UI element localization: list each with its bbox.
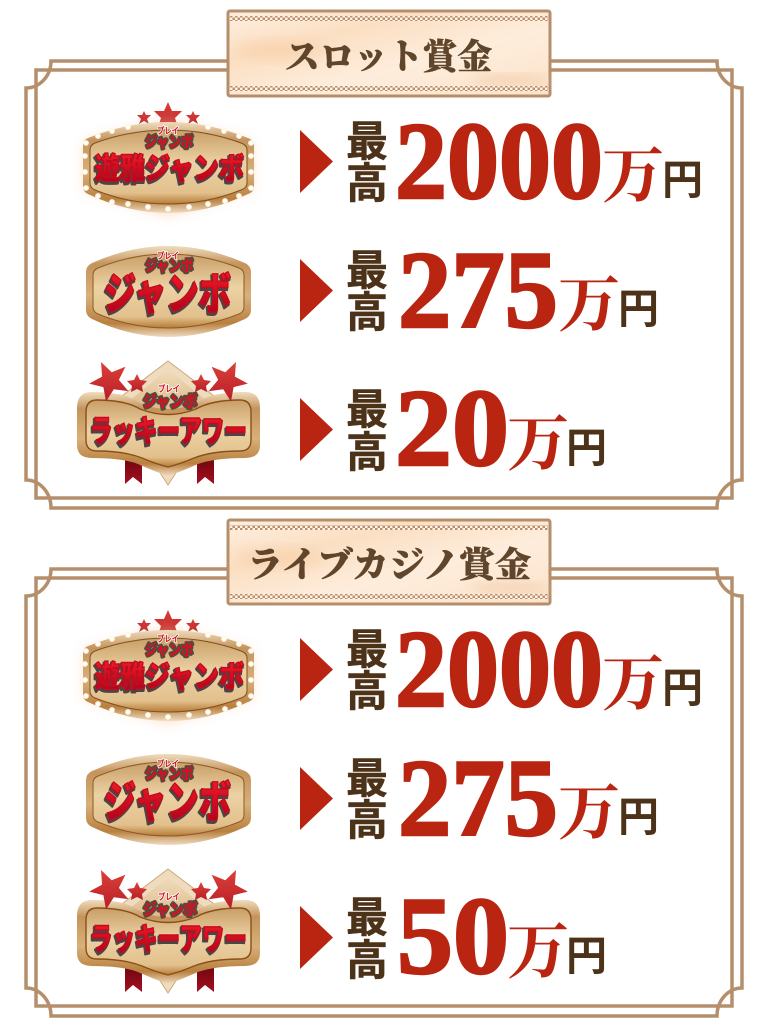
prize row: 275万円: 275 <box>398 737 558 859</box>
prize row: 50万円 <box>300 875 607 997</box>
prize row: 2000万円 <box>300 100 703 222</box>
prize row: 2000万円: 万 <box>602 126 664 215</box>
prize row: 2000万円: 高 <box>346 668 388 715</box>
prize row: 275万円: 円 <box>618 794 659 840</box>
badge: ラッキーアワー: ラッキーアワー <box>90 414 247 449</box>
badge: ジャンボ: ジャンボ <box>104 778 231 827</box>
badge: 遊雅ジャンボ: 遊雅ジャンボ <box>94 155 243 188</box>
prize row: 275万円: 最 <box>346 247 388 294</box>
prize row: 275万円: 万 <box>558 763 620 852</box>
badge: 遊雅ジャンボ: 遊雅ジャンボ <box>94 663 243 696</box>
panel: live casino prizes <box>26 520 742 1016</box>
prize row: 20万円 <box>300 367 607 489</box>
badge: 遊雅ジャンボ: プレイ <box>157 126 179 136</box>
badge: ジャンボ <box>86 754 251 845</box>
badge: ラッキーアワー: ラッキーアワー <box>89 924 246 959</box>
prize row: 2000万円: 最 <box>346 118 388 165</box>
badge: ジャンボ: ジャンボ <box>145 258 193 275</box>
prize row: 2000万円: 円 <box>662 157 703 203</box>
badge: 遊雅ジャンボ: ジャンボ <box>145 642 193 659</box>
badge: 遊雅ジャンボ <box>83 102 254 216</box>
prize row: 50万円: 万 <box>507 902 569 991</box>
prize row: 20万円: 高 <box>346 429 388 476</box>
badge: 遊雅ジャンボ: 遊雅ジャンボ <box>95 661 244 694</box>
heading: スロット賞金 <box>285 30 492 80</box>
prize row: 275万円: 高 <box>346 289 388 336</box>
prize row: 20万円: 円 <box>566 425 607 471</box>
badge: ラッキーアワー: ラッキーアワー <box>89 416 246 451</box>
prize row: 2000万円: 万 <box>602 634 664 723</box>
panel frame <box>26 61 742 508</box>
prize row: 2000万円: 最 <box>346 626 388 673</box>
prize row: 2000万円: 高 <box>346 160 388 207</box>
badge: ラッキーアワー <box>77 869 260 993</box>
badge: ジャンボ: ジャンボ <box>103 780 230 829</box>
panel: slot prizes <box>26 11 742 508</box>
badge: 遊雅ジャンボ: 遊雅ジャンボ <box>95 153 244 186</box>
prize row: 275万円 <box>300 229 659 351</box>
panel frame <box>26 569 742 1016</box>
badge: 遊雅ジャンボ: ジャンボ <box>145 134 193 151</box>
badge: ラッキーアワー <box>77 361 260 485</box>
badge: ジャンボ: プレイ <box>157 251 179 261</box>
prize row: 50万円: 50 <box>397 875 509 997</box>
badge: 遊雅ジャンボ: プレイ <box>157 634 179 644</box>
prize row: 20万円: 最 <box>346 386 388 433</box>
title plate <box>228 11 550 96</box>
prize row: 50万円: 最 <box>346 894 388 941</box>
prize row: 275万円: 275 <box>398 229 558 351</box>
prize row: 275万円: 最 <box>346 755 388 802</box>
badge: ジャンボ: プレイ <box>157 759 179 769</box>
prize row: 20万円: 万 <box>507 394 569 483</box>
badge: ジャンボ: ジャンボ <box>104 270 231 319</box>
badge: ラッキーアワー: ジャンボ <box>143 393 197 411</box>
prize row: 2000万円: 円 <box>662 665 703 711</box>
heading: ライブカジノ賞金 <box>247 538 531 588</box>
prize row: 2000万円: 2000 <box>395 608 603 730</box>
prize row: 2000万円: 2000 <box>395 100 603 222</box>
title plate <box>228 520 550 604</box>
prize row: 50万円: 高 <box>346 937 388 984</box>
badge: ジャンボ: ジャンボ <box>145 766 193 783</box>
badge: ジャンボ: ジャンボ <box>103 272 230 321</box>
prize row: 20万円: 20 <box>395 367 509 489</box>
badge: 遊雅ジャンボ <box>83 610 254 724</box>
prize row: 275万円: 万 <box>558 255 620 344</box>
badge: ラッキーアワー: プレイ <box>158 384 180 394</box>
badge: ジャンボ <box>86 246 251 337</box>
prize row: 2000万円 <box>300 608 703 730</box>
prize row: 275万円: 高 <box>346 797 388 844</box>
prize row: 275万円 <box>300 737 659 859</box>
badge: ラッキーアワー: プレイ <box>158 892 180 902</box>
prize row: 50万円: 円 <box>566 933 607 979</box>
badge: ラッキーアワー: ラッキーアワー <box>90 922 247 957</box>
prize row: 275万円: 円 <box>618 286 659 332</box>
badge: ラッキーアワー: ジャンボ <box>143 901 197 919</box>
